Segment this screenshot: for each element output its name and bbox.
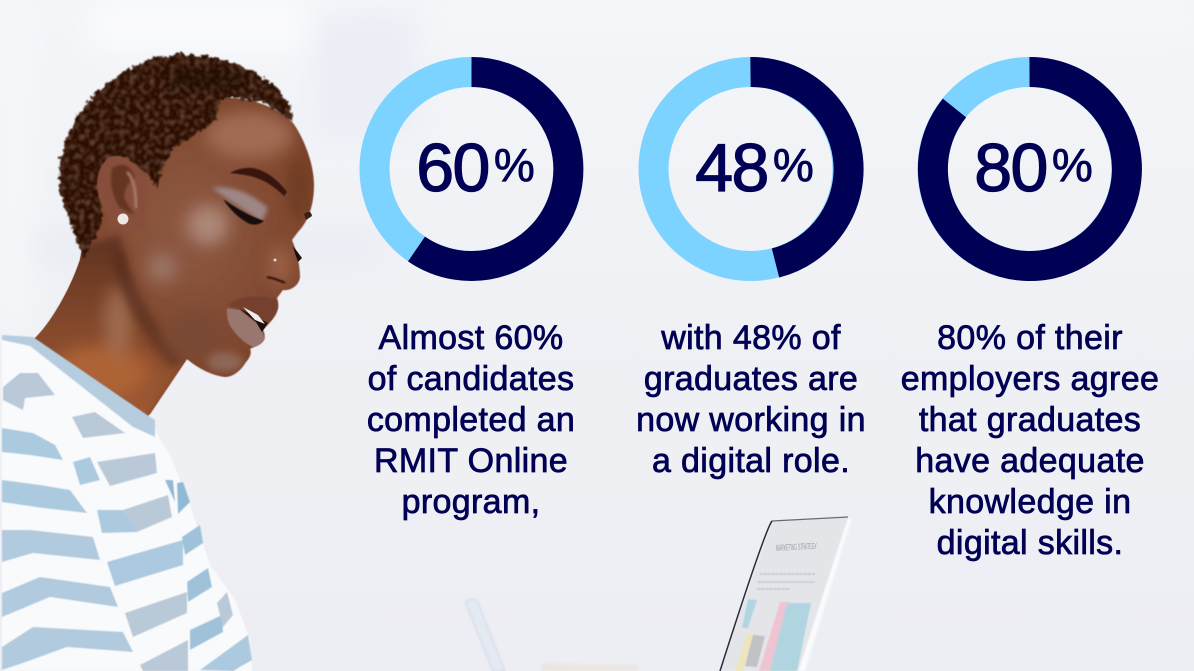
value: 80%: 80% — [974, 130, 1093, 206]
caption: employers: 80% of their — [937, 319, 1123, 357]
laptop: MARKETING STRATEGY — [776, 541, 817, 553]
caption: digital role: now working in — [636, 401, 866, 439]
hair — [59, 54, 293, 258]
neck and face — [30, 98, 314, 422]
eye and brow — [212, 168, 312, 283]
caption: employers: have adequate — [915, 442, 1145, 480]
striped shirt — [2, 335, 252, 671]
caption: employers: digital skills. — [937, 524, 1123, 562]
caption: digital role: with 48% of — [661, 319, 841, 357]
pen — [465, 599, 505, 671]
caption: completion: of candidates — [368, 360, 574, 398]
caption: completion: Almost 60% — [379, 319, 563, 357]
value: 48%: 48% — [695, 130, 814, 206]
caption: digital role: a digital role. — [652, 442, 850, 480]
cup — [541, 663, 638, 671]
caption: completion: program, — [402, 483, 540, 521]
ear with pearl earring — [97, 156, 146, 233]
caption: digital role — [636, 319, 866, 480]
caption: employers: that graduates — [919, 401, 1141, 439]
caption: completion: completed an — [367, 401, 575, 439]
caption: digital role: graduates are — [644, 360, 858, 398]
background: blurred window — [0, 0, 1194, 330]
caption: employers: employers agree — [901, 360, 1159, 398]
caption: employers — [901, 319, 1159, 562]
mouth — [227, 296, 278, 347]
laptop — [720, 517, 851, 671]
value: 60%: 60% — [416, 130, 535, 206]
caption: completion: RMIT Online — [374, 442, 568, 480]
woman — [2, 54, 314, 671]
caption: completion — [367, 319, 575, 521]
caption: employers: knowledge in — [929, 483, 1131, 521]
